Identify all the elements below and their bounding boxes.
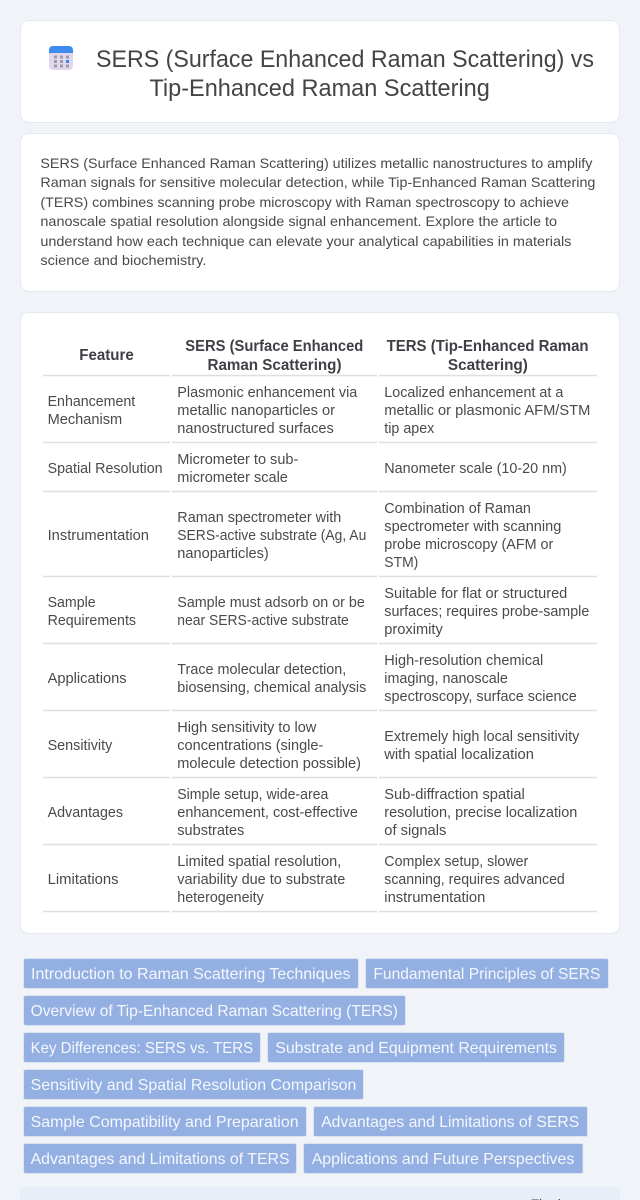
row: sample requirements: Requirements — [48, 613, 136, 629]
row: sensitivity: Sensitivity — [48, 738, 113, 754]
row: instrumentation: Raman spectrometer with — [177, 510, 341, 526]
row: applications: Trace molecular detection, — [177, 662, 346, 678]
row: enhancement mechanism — [43, 385, 597, 442]
row: sample requirements: near SERS-active substrate — [177, 613, 349, 629]
row: spatial resolution: Micrometer to sub- — [177, 452, 299, 468]
row: applications: Applications — [48, 671, 127, 687]
row: spatial resolution — [43, 452, 597, 492]
row: sample requirements — [43, 586, 597, 644]
row: sensitivity: High sensitivity to low — [177, 720, 317, 736]
tag: overview of TERS: Overview of Tip-Enhanced Raman Scattering (TERS) — [31, 1003, 398, 1020]
row: sensitivity: Extremely high local sensitivity — [384, 729, 580, 745]
table header — [43, 338, 597, 376]
tag: applications and future: Applications and Future Perspectives — [312, 1151, 574, 1168]
panel: introduction text — [20, 134, 620, 292]
row: limitations — [43, 854, 597, 912]
row: instrumentation: SERS-active substrate (Ag, Au — [177, 528, 366, 544]
row: sample requirements: proximity — [384, 622, 444, 638]
table header: Feature — [79, 347, 134, 364]
tag list — [24, 958, 608, 1174]
row: advantages: enhancement, cost-effective — [177, 805, 358, 821]
panel: title card — [20, 20, 620, 122]
row: sample requirements: surfaces; requires probe-sample — [384, 604, 589, 620]
tag: fundamental principles: Fundamental Principles of SERS — [373, 966, 600, 983]
tag: key differences — [24, 1032, 260, 1062]
row: instrumentation: probe microscopy (AFM or — [384, 537, 553, 553]
panel: introduction text: understand how each technique can elevate your analytical capabilities in materials — [40, 233, 571, 249]
tag: sensitivity comparison: Sensitivity and Spatial Resolution Comparison — [31, 1077, 356, 1094]
tag: advantages of SERS: Advantages and Limitations of SERS — [321, 1114, 579, 1131]
row: advantages: substrates — [177, 823, 244, 839]
row: enhancement mechanism: Mechanism — [48, 412, 122, 428]
row: advantages: resolution, precise localization — [384, 805, 577, 821]
row: applications: High-resolution chemical — [384, 653, 543, 669]
row: sample requirements: Suitable for flat or structured — [384, 586, 567, 602]
title — [96, 46, 594, 102]
panel: introduction text: Raman signals for sensitive molecular detection, while Tip-Enhanced Raman Scattering — [40, 174, 595, 190]
row: advantages: Advantages — [48, 805, 123, 821]
row: limitations: Limitations — [48, 872, 119, 888]
row: applications — [43, 653, 597, 710]
row: sample requirements: Sample — [48, 595, 96, 611]
row: instrumentation: STM) — [384, 555, 418, 571]
row: sensitivity — [43, 720, 597, 778]
tag: advantages of TERS: Advantages and Limitations of TERS — [31, 1151, 290, 1168]
table header: TERS (Tip-Enhanced Raman — [387, 338, 589, 355]
table header: Scattering) — [448, 357, 528, 374]
row: instrumentation: Instrumentation — [48, 528, 149, 544]
table header: SERS (Surface Enhanced — [185, 338, 363, 355]
row: spatial resolution: Nanometer scale (10-20 nm) — [384, 461, 567, 477]
row: enhancement mechanism: metallic or plasmonic AFM/STM — [384, 403, 590, 419]
tag: substrate and equipment — [268, 1032, 564, 1062]
row: limitations: Limited spatial resolution, — [177, 854, 341, 870]
panel: introduction text: (TERS) combines scanning probe microscopy with Raman spectroscopy to achieve — [40, 194, 569, 210]
row: limitations: heterogeneity — [177, 890, 265, 906]
row: instrumentation: spectrometer with scanning — [384, 519, 561, 535]
row: spatial resolution: micrometer scale — [177, 470, 288, 486]
row: applications: biosensing, chemical analysis — [177, 680, 366, 696]
row: limitations: variability due to substrate — [177, 872, 345, 888]
row: sample requirements: Sample must adsorb on or be — [177, 595, 365, 611]
icon: calendar — [49, 46, 73, 70]
tag: fundamental principles — [366, 958, 608, 988]
tag: applications and future — [304, 1144, 583, 1174]
tag: sample compatibility: Sample Compatibility and Preparation — [31, 1114, 299, 1131]
panel: introduction text: SERS (Surface Enhanced Raman Scattering) utilizes metallic nanostructures to amplify — [40, 155, 592, 171]
row: enhancement mechanism: metallic nanoparticles or — [177, 403, 335, 419]
panel: footer — [20, 1187, 620, 1200]
title: Tip-Enhanced Raman Scattering — [149, 75, 490, 102]
row: advantages: Sub-diffraction spatial — [384, 787, 525, 803]
row: advantages: Simple setup, wide-area — [177, 787, 328, 803]
row: advantages: of signals — [384, 823, 446, 839]
row: advantages — [43, 787, 597, 844]
tag: sensitivity comparison — [24, 1070, 364, 1100]
row: instrumentation — [43, 501, 597, 576]
row: limitations: Complex setup, slower — [384, 854, 528, 870]
row: instrumentation: nanoparticles) — [177, 546, 269, 562]
row: applications: spectroscopy, surface science — [384, 689, 577, 705]
row: sensitivity: concentrations (single- — [177, 738, 324, 754]
row: limitations: instrumentation — [384, 890, 485, 906]
row: applications: imaging, nanoscale — [384, 671, 508, 687]
tag: sample compatibility — [24, 1106, 306, 1136]
row: limitations: scanning, requires advanced — [384, 872, 565, 888]
row: enhancement mechanism: Enhancement — [48, 394, 135, 410]
panel: comparison table — [20, 312, 620, 934]
row: instrumentation: Combination of Raman — [384, 501, 531, 517]
row: sensitivity: molecule detection possible) — [177, 756, 361, 772]
tag: advantages of TERS — [24, 1144, 296, 1174]
tag: advantages of SERS — [314, 1106, 588, 1136]
tag: introduction — [24, 958, 358, 988]
title: SERS (Surface Enhanced Raman Scattering) vs — [96, 46, 594, 73]
tag: key differences: Key Differences: SERS vs. TERS — [31, 1040, 253, 1057]
table header: Raman Scattering) — [208, 357, 342, 374]
row: enhancement mechanism: Localized enhancement at a — [384, 385, 563, 401]
tag: overview of TERS — [24, 996, 406, 1026]
panel: introduction text: nanoscale spatial resolution alongside signal enhancement. Explore the article to — [40, 213, 557, 229]
row: enhancement mechanism: Plasmonic enhancement via — [177, 385, 357, 401]
row: spatial resolution: Spatial Resolution — [48, 461, 163, 477]
tag: introduction: Introduction to Raman Scattering Techniques — [31, 966, 350, 983]
row: enhancement mechanism: nanostructured surfaces — [177, 421, 334, 437]
row: enhancement mechanism: tip apex — [384, 421, 435, 437]
panel: introduction text: science and biochemistry. — [40, 252, 206, 268]
row: sensitivity: with spatial localization — [383, 747, 534, 763]
tag: substrate and equipment: Substrate and Equipment Requirements — [275, 1040, 557, 1057]
